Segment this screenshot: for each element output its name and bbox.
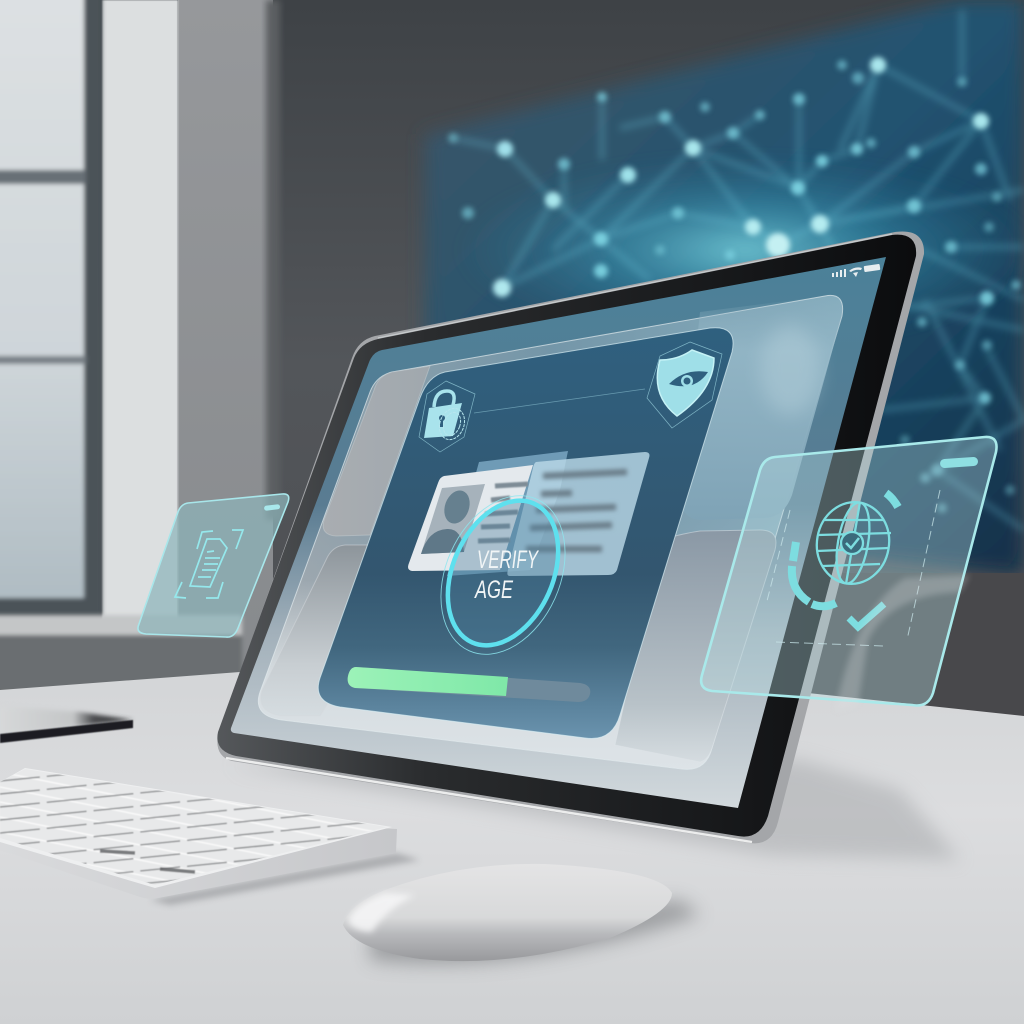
verify age label: VERIFY (477, 546, 540, 574)
icon: lock and fingerprint (419, 381, 475, 452)
wall display: network (425, 0, 1024, 575)
lower wall right of tablet (760, 573, 1024, 723)
back glass panel (258, 295, 843, 769)
window sill (0, 615, 242, 693)
connector line (474, 389, 645, 413)
mouse body (343, 864, 672, 961)
glass card text lines (526, 472, 627, 549)
dashed guides (766, 490, 940, 646)
chair reflection behind panel (835, 575, 970, 712)
floating panel: document scan (138, 494, 289, 637)
progress arcs around globe (792, 493, 898, 606)
tablet bezel (217, 235, 916, 837)
icon: check mark (849, 604, 884, 627)
glass ID card (507, 452, 650, 576)
glass tile light spot (760, 325, 820, 415)
mouse highlight (348, 893, 415, 932)
keyboard body (0, 810, 397, 899)
ID card stack (408, 451, 650, 576)
verify ring (417, 476, 589, 674)
network glow (455, 155, 1024, 345)
desk shadow of tablet (230, 760, 960, 860)
icon: shield with eye (647, 342, 722, 428)
ID text lines (478, 484, 528, 541)
status icons (832, 264, 880, 277)
verify age label: AGE (474, 576, 513, 604)
network lines (453, 10, 1024, 530)
keyboard keys (0, 774, 366, 884)
back ID card (447, 451, 568, 576)
glass tile: upper left (323, 366, 430, 536)
keyboard (0, 732, 417, 908)
back wall (0, 0, 1024, 730)
progress bar (348, 667, 590, 702)
glass tile: upper right (680, 295, 843, 520)
tablet (217, 231, 924, 843)
tablet silver edge (217, 231, 924, 843)
keyboard shadow (150, 853, 420, 905)
main verification card (318, 328, 733, 739)
tablet top highlight (378, 234, 892, 338)
ID photo (421, 484, 485, 554)
glass tile: lower left (261, 545, 372, 716)
tablet lower highlight (226, 758, 752, 842)
glass tile: lower right (615, 530, 776, 762)
mouse shadow (370, 900, 700, 964)
network nodes (448, 57, 1021, 513)
floating panel: global verification (701, 437, 997, 706)
icon: globe with check (810, 496, 896, 590)
icon: document with scan brackets (175, 530, 243, 598)
tablet screen (231, 257, 886, 808)
window (0, 0, 102, 616)
desk (0, 672, 1024, 1024)
phone on desk (0, 706, 133, 743)
mouse (343, 864, 700, 964)
front ID card (408, 465, 533, 571)
verify age label (474, 546, 540, 604)
